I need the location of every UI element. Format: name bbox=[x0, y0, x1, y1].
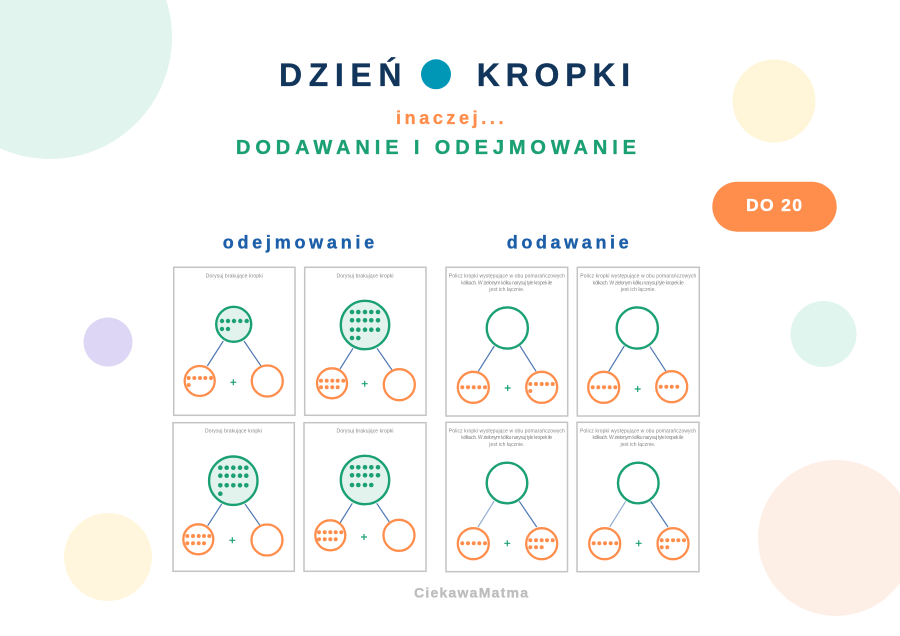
worksheet 4: subtraction: Dorysuj brakujące kropki bbox=[336, 428, 394, 434]
worksheet 7: addition bbox=[446, 422, 568, 572]
title bbox=[279, 57, 630, 93]
worksheet 6: addition: jest ich łącznie. bbox=[620, 287, 656, 293]
worksheet 7: addition: kółkach. W zielonym kółku narysuj tyle kropek ile bbox=[461, 435, 553, 441]
worksheet 6: addition: kółkach. W zielonym kółku narysuj tyle kropek ile bbox=[593, 280, 684, 286]
subtitle: inaczej: inaczej... bbox=[396, 108, 504, 128]
heading: dodawanie i odejmowanie: DODAWANIE I ODEJMOWANIE bbox=[236, 137, 636, 159]
worksheet 3: subtraction bbox=[173, 423, 294, 571]
background circle: lavender bbox=[84, 318, 132, 366]
footer: brand: CiekawaMatma bbox=[414, 584, 528, 600]
worksheet 1: subtraction bbox=[174, 267, 295, 415]
worksheet 2: subtraction: Dorysuj brakujące kropki bbox=[336, 274, 394, 280]
icon: title dot bbox=[421, 59, 451, 89]
worksheet 7: addition: jest ich łącznie. bbox=[488, 442, 524, 448]
worksheet 8: addition: jest ich łącznie. bbox=[620, 442, 656, 448]
worksheet 8: addition: kółkach. W zielonym kółku narysuj tyle kropek ile bbox=[592, 435, 684, 441]
worksheet 8: addition bbox=[577, 422, 699, 572]
badge: do 20: DO 20 bbox=[746, 195, 802, 215]
worksheet 5: addition: kółkach. W zielonym kółku narysuj tyle kropek ile bbox=[461, 280, 553, 286]
background circle: right mint bbox=[790, 301, 856, 367]
worksheet 1: subtraction: Dorysuj brakujące kropki bbox=[206, 274, 263, 280]
worksheet 3: subtraction: Dorysuj brakujące kropki bbox=[205, 428, 262, 434]
worksheet 4: subtraction bbox=[304, 423, 426, 571]
worksheet 8: addition: Policz kropki występujące w obu pomarańczowych bbox=[580, 428, 696, 434]
worksheet 5: addition: Policz kropki występujące w obu pomarańczowych bbox=[449, 274, 565, 280]
worksheet 7: addition: Policz kropki występujące w obu pomarańczowych bbox=[449, 428, 565, 434]
worksheet 5: addition bbox=[446, 267, 568, 416]
background circle: top right yellow bbox=[732, 60, 816, 142]
heading: odejmowanie: odejmowanie bbox=[223, 233, 374, 253]
worksheet 6: addition bbox=[577, 267, 699, 416]
background circle: bottom left yellow bbox=[64, 513, 152, 601]
title: DZIEŃ bbox=[279, 57, 402, 93]
worksheet 6: addition: Policz kropki występujące w obu pomarańczowych bbox=[580, 274, 697, 280]
background circle: top left mint bbox=[0, 0, 172, 159]
badge: do 20 bbox=[712, 182, 837, 232]
heading: dodawanie: dodawanie bbox=[507, 233, 629, 253]
background circle: bottom right peach bbox=[758, 460, 900, 616]
worksheet 2: subtraction bbox=[305, 267, 426, 415]
worksheet 5: addition: jest ich łącznie. bbox=[488, 287, 524, 293]
title: KROPKI bbox=[477, 57, 630, 93]
